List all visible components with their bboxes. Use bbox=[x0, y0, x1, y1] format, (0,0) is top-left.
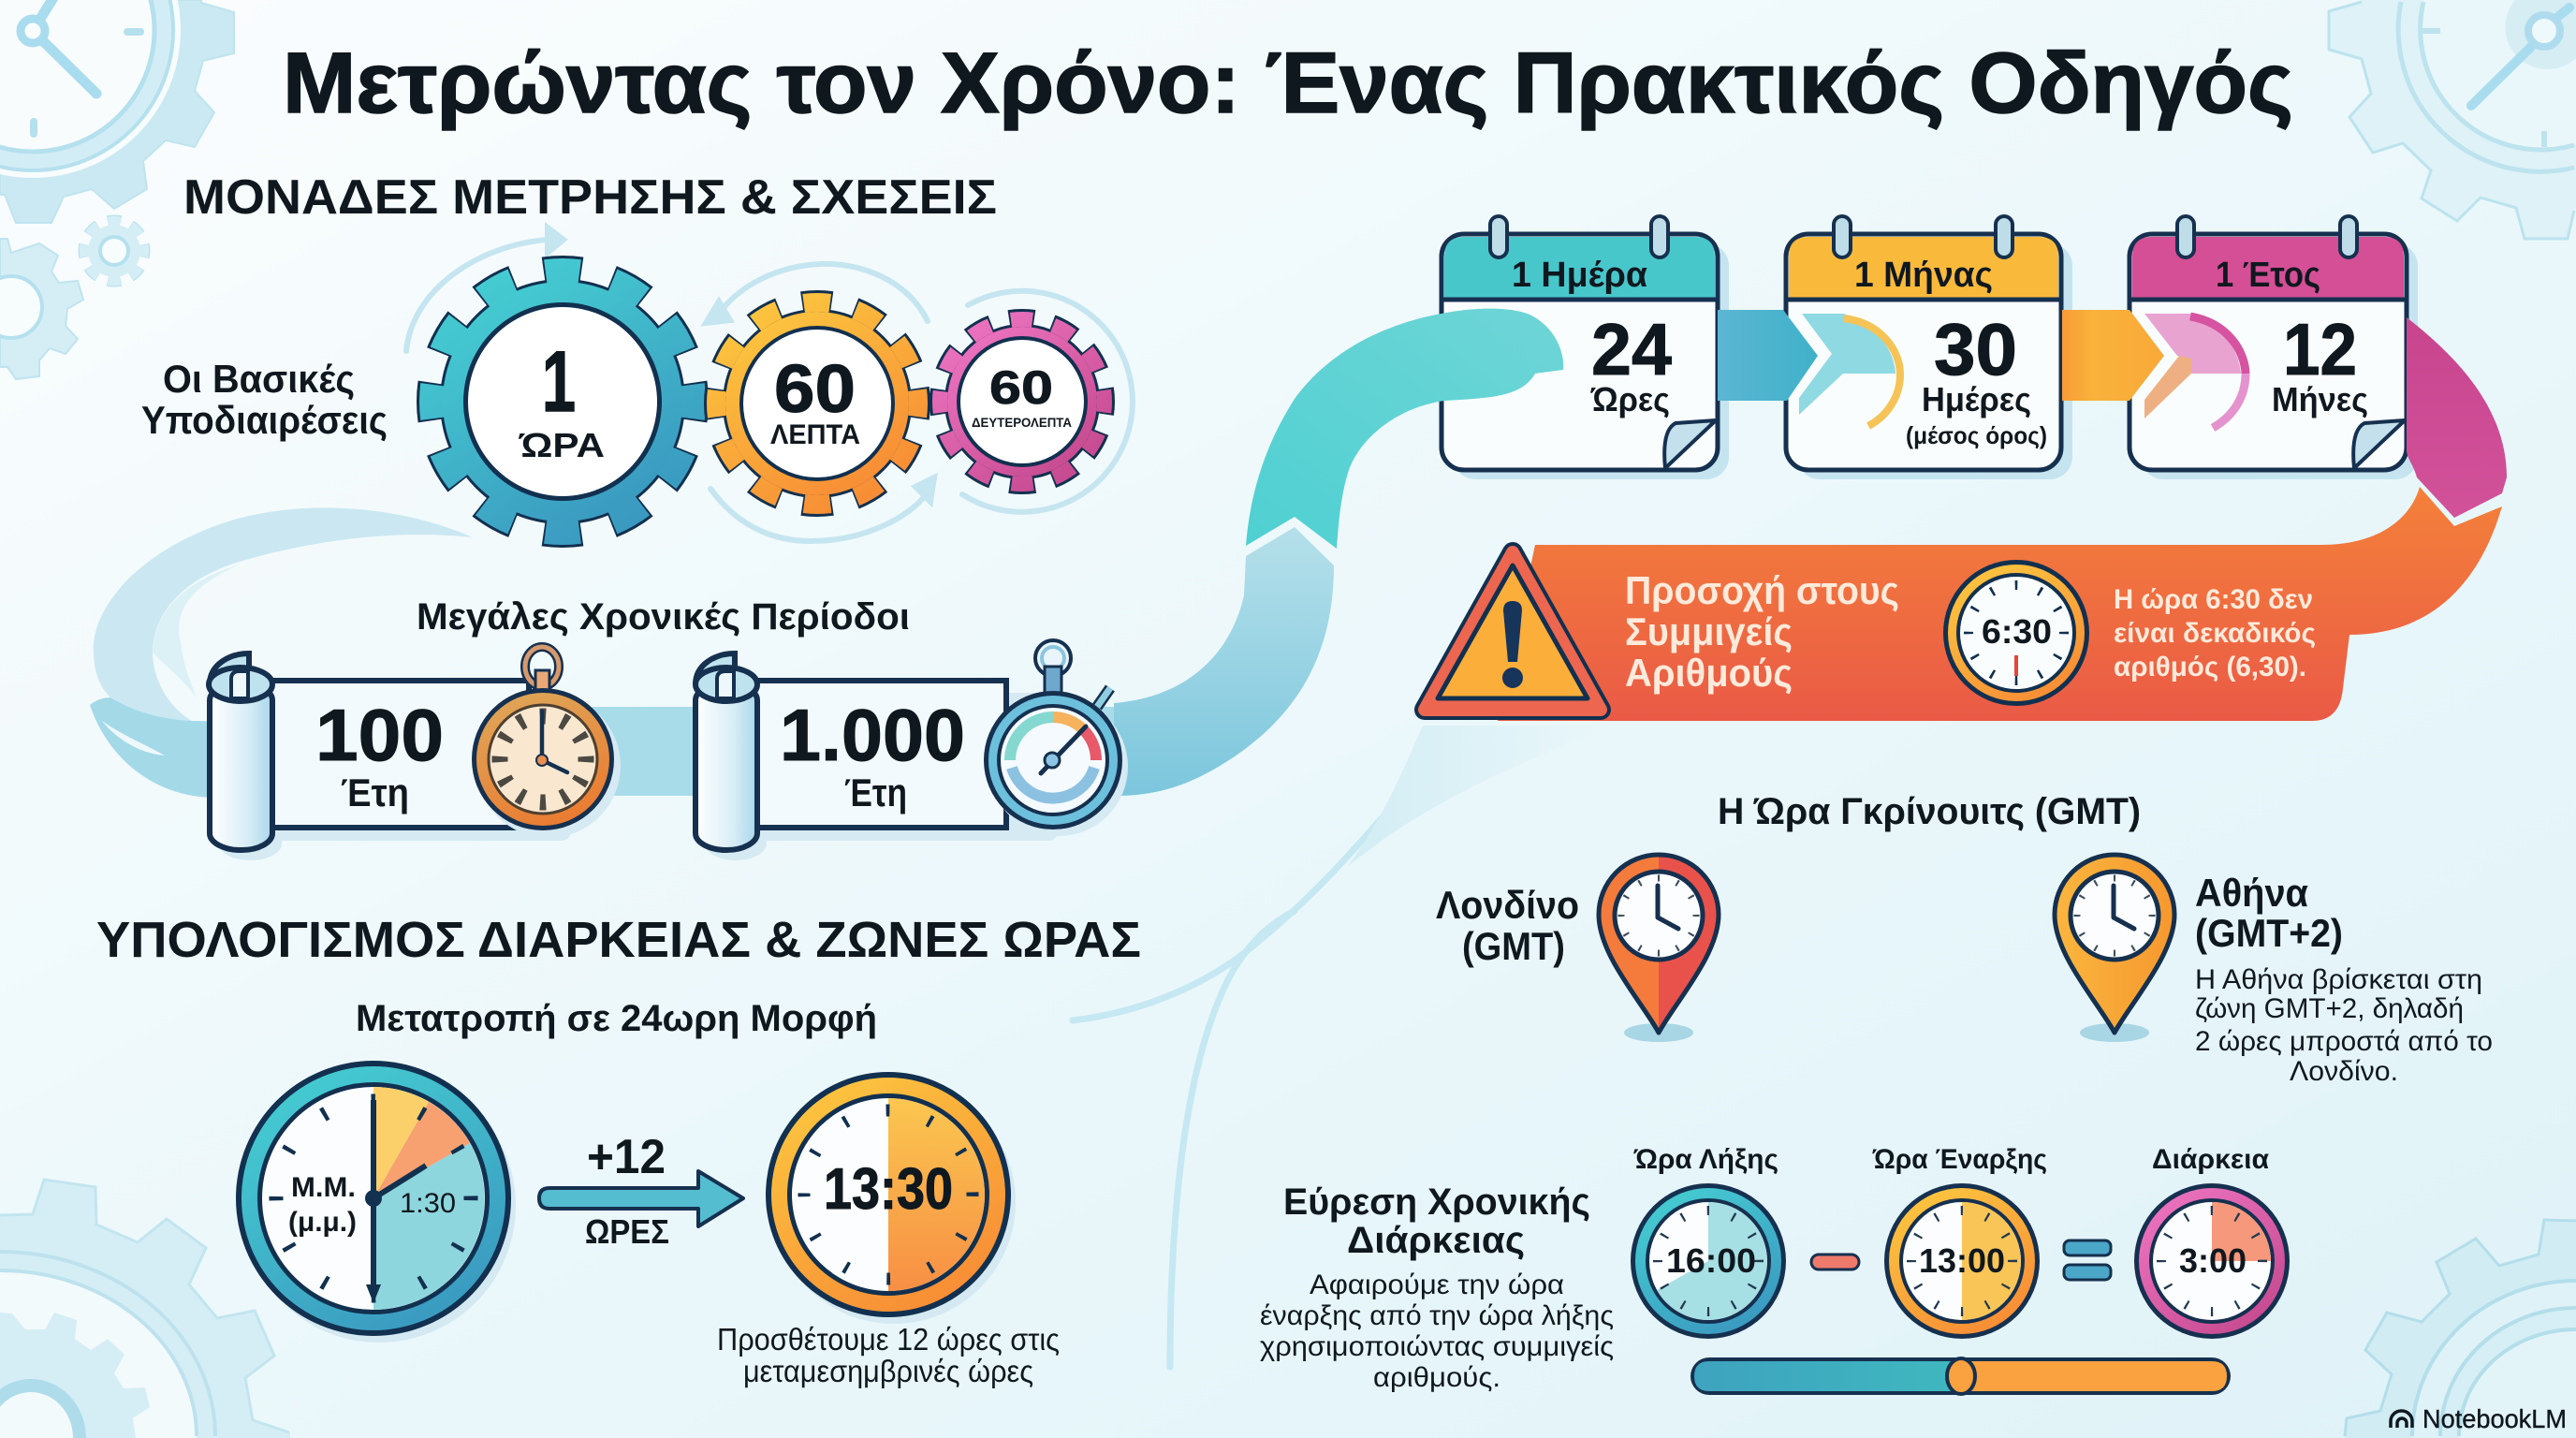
labels: end, start, duration: Ώρα Έναρξης bbox=[1872, 1144, 2047, 1175]
gear: 60 minutes bbox=[716, 302, 918, 505]
clock: 1:30 pm bbox=[236, 1061, 516, 1343]
calendar numbers: (μέσος όρος) bbox=[1906, 421, 2047, 449]
note: add 12 hours: μεταμεσημβρινές ώρες bbox=[743, 1354, 1033, 1388]
gear: 60 seconds: ΔΕΥΤΕΡΟΛΕΠΤΑ bbox=[972, 415, 1072, 430]
symbol: minus bbox=[1811, 1255, 1859, 1269]
text: basic subdivisions: Υποδιαιρέσεις bbox=[141, 398, 388, 442]
clock: 6:30 bbox=[1943, 560, 2089, 706]
labels: end, start, duration: Διάρκεια bbox=[2152, 1144, 2270, 1175]
ribbon: teal into day calendar bbox=[1246, 309, 1563, 549]
labels: end, start, duration bbox=[1633, 1144, 2270, 1175]
text: Athens: Αθήνα bbox=[2195, 871, 2308, 915]
clock: 13:30 bbox=[766, 1072, 1016, 1324]
clock: 3:00: 3:00 bbox=[2179, 1241, 2247, 1280]
callout: mixed numbers warning: Η ώρα 6:30 δεν bbox=[2114, 584, 2313, 615]
calendar numbers: Ημέρες bbox=[1922, 380, 2031, 418]
icon: London pin bbox=[1599, 855, 1719, 1042]
background thin connector lines bbox=[1073, 726, 1610, 1367]
clock: 1:30 pm: (μ.μ.) bbox=[288, 1207, 357, 1238]
note: add 12 hours bbox=[717, 1322, 1060, 1388]
clock: 16:00 bbox=[1631, 1183, 1786, 1339]
subheading: large time periods: Μεγάλες Χρονικές Περίοδοι bbox=[417, 596, 910, 638]
subheading: GMT: Η Ώρα Γκρίνουιτς (GMT) bbox=[1718, 791, 2141, 832]
calendar: 1 month bbox=[1786, 216, 2072, 479]
clock: 1:30 pm: 1:30 bbox=[400, 1188, 456, 1219]
gear: 1 hour: 1 bbox=[542, 334, 576, 430]
clock: 13:00: 13:00 bbox=[1919, 1241, 2005, 1280]
text: Athens: 2 ώρες μπροστά από το bbox=[2195, 1026, 2493, 1057]
swirl ribbon: left side bbox=[90, 507, 473, 798]
text: Athens: (GMT+2) bbox=[2195, 911, 2343, 955]
clock: 1:30 pm: Μ.Μ. bbox=[291, 1172, 356, 1203]
ribbon: amber arrow month to year bbox=[2062, 310, 2164, 401]
arrows around the gears bbox=[406, 227, 1133, 541]
decorative gear: small bbox=[85, 222, 143, 280]
callout: mixed numbers warning bbox=[1425, 487, 2502, 721]
calendar numbers: 30 bbox=[1934, 308, 2017, 390]
text: finding duration: Διάρκειας bbox=[1347, 1220, 1525, 1261]
calendar numbers bbox=[1590, 308, 2368, 449]
gear: 1 hour bbox=[432, 271, 694, 533]
icon: warning triangle bbox=[1425, 552, 1601, 710]
gear: 60 minutes: 60 bbox=[774, 352, 856, 427]
arrow: plus 12 hours: ΩΡΕΣ bbox=[585, 1212, 669, 1251]
callout: mixed numbers warning: Προσοχή στους bbox=[1625, 568, 1899, 612]
calendar: 1 year: 1 Έτος bbox=[2216, 256, 2320, 295]
text: Athens: ζώνη GMT+2, δηλαδή bbox=[2195, 993, 2464, 1024]
decorative gear: left middle bbox=[0, 239, 83, 379]
arrow: plus 12 hours bbox=[539, 1130, 743, 1251]
heading: duration and time zones: ΥΠΟΛΟΓΙΣΜΟΣ ΔΙΑΡΚΕΙΑΣ & ΖΩΝΕΣ ΩΡΑΣ bbox=[96, 912, 1141, 968]
gear: 60 minutes: ΛΕΠΤΑ bbox=[770, 419, 860, 450]
gear: 1 hour: ΏΡΑ bbox=[519, 426, 605, 464]
text: London: Λονδίνο bbox=[1436, 883, 1579, 927]
gear: 60 seconds bbox=[940, 319, 1105, 484]
scroll: 1000 years bbox=[695, 640, 1128, 860]
scroll: 1000 years: Έτη bbox=[844, 770, 907, 814]
calendar numbers: 24 bbox=[1591, 308, 1672, 390]
text: finding duration: έναρξης από την ώρα λήξης bbox=[1260, 1300, 1614, 1331]
watermark: NotebookLM: NotebookLM bbox=[2422, 1404, 2567, 1433]
decorative gear: bottom left bbox=[0, 1180, 290, 1438]
icon: Athens pin bbox=[2055, 855, 2174, 1042]
text: finding duration: αριθμούς. bbox=[1373, 1362, 1500, 1393]
callout: mixed numbers warning: Αριθμούς bbox=[1625, 651, 1793, 695]
scroll: 100 years bbox=[209, 647, 621, 860]
gear: 60 seconds: 60 bbox=[989, 361, 1053, 414]
scroll: 1000 years: 1.000 bbox=[780, 694, 965, 776]
text: London bbox=[1436, 883, 1579, 968]
callout: mixed numbers warning: αριθμός (6,30). bbox=[2114, 652, 2306, 682]
text: Athens: Η Αθήνα βρίσκεται στη bbox=[2195, 964, 2482, 995]
icon: stopwatch bbox=[984, 640, 1128, 836]
heading: units section: ΜΟΝΑΔΕΣ ΜΕΤΡΗΣΗΣ & ΣΧΕΣΕΙΣ bbox=[183, 170, 997, 225]
decorative gear: top left bbox=[0, 0, 234, 223]
calendar numbers: 12 bbox=[2283, 308, 2357, 390]
ribbon: magenta after year calendar bbox=[2407, 317, 2507, 518]
text: finding duration: Εύρεση Χρονικής bbox=[1283, 1181, 1590, 1223]
subheading: 24h conversion: Μετατροπή σε 24ωρη Μορφή bbox=[356, 998, 877, 1039]
clock: 16:00: 16:00 bbox=[1666, 1241, 1756, 1280]
note: add 12 hours: Προσθέτουμε 12 ώρες στις bbox=[717, 1322, 1060, 1357]
callout: mixed numbers warning: είναι δεκαδικός bbox=[2114, 618, 2316, 649]
calendar: 1 month: 1 Μήνας bbox=[1854, 256, 1993, 295]
calendar: 1 year bbox=[2130, 216, 2418, 479]
bar: duration progress bbox=[1690, 1357, 2231, 1395]
scroll: 100 years: 100 bbox=[315, 694, 444, 776]
ribbon: blue band from century scroll to teal ribbon bbox=[562, 527, 1334, 796]
clock: 3:00 bbox=[2134, 1183, 2290, 1339]
text: finding duration: Αφαιρούμε την ώρα bbox=[1310, 1269, 1564, 1300]
clock: 6:30: 6:30 bbox=[1982, 612, 2052, 651]
heading: title: Μετρώντας τον Χρόνο: Ένας Πρακτικός Οδηγός bbox=[283, 36, 2293, 131]
calendar numbers: Ώρες bbox=[1590, 380, 1670, 418]
text: finding duration bbox=[1260, 1181, 1614, 1393]
ribbon: blue arrow day to month bbox=[1718, 310, 1818, 401]
scroll: 100 years: Έτη bbox=[341, 770, 409, 814]
text: Athens bbox=[2195, 871, 2493, 1087]
text: basic subdivisions: Οι Βασικές bbox=[163, 357, 355, 401]
calendar: 1 day bbox=[1442, 216, 1729, 479]
text: Athens: Λονδίνο. bbox=[2290, 1056, 2398, 1087]
text: finding duration: χρησιμοποιώντας συμμιγείς bbox=[1260, 1331, 1614, 1362]
calendar: 1 day: 1 Ημέρα bbox=[1512, 256, 1647, 295]
ribbon: month inner chevron bbox=[1799, 314, 1900, 426]
ribbon: year inner chevron bbox=[2144, 314, 2246, 428]
calendar numbers: Μήνες bbox=[2272, 380, 2368, 418]
decorative gear: bottom right bbox=[2345, 1219, 2576, 1438]
icon: pocket watch bbox=[472, 647, 621, 838]
arrow: plus 12 hours: +12 bbox=[587, 1130, 666, 1184]
decorative gear: top right bbox=[2329, 0, 2576, 239]
callout: mixed numbers warning: Συμμιγείς bbox=[1625, 609, 1793, 653]
clock: 13:00 bbox=[1884, 1183, 2040, 1339]
clock: 13:30: 13:30 bbox=[824, 1157, 953, 1222]
text: London: (GMT) bbox=[1462, 924, 1565, 968]
symbol: equals bbox=[2064, 1240, 2111, 1280]
text: basic subdivisions bbox=[141, 357, 388, 442]
labels: end, start, duration: Ώρα Λήξης bbox=[1633, 1144, 1778, 1175]
